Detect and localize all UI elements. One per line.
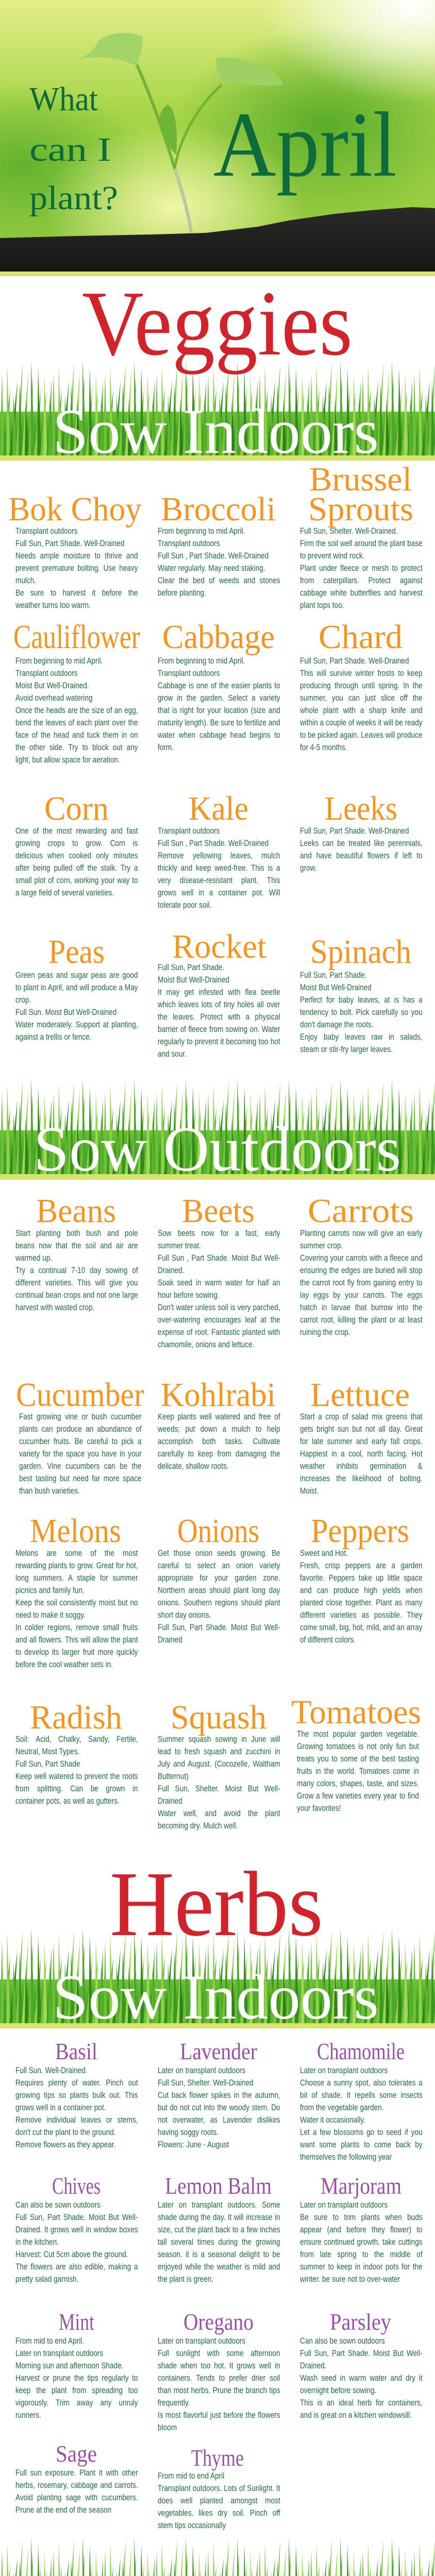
veggie: Lettuce: Lettuce [310, 1376, 410, 1414]
text: Chamomile: Let a few blossoms go to seed if you want some plants to come back by themselves the following year [300, 2127, 423, 2162]
text: Cauliflower: From beginning to mid April. [15, 656, 103, 666]
veggie: Cucumber: Cucumber [16, 1376, 144, 1414]
text: Oregano: Is most flavorful just before the flowers bloom [158, 2410, 280, 2432]
text: Radish [15, 1733, 138, 1807]
text: Mint: Harvest or prune the tips regularly to keep the plant from spreading too vigorously. Trim away any unruly runners. [15, 2373, 138, 2420]
veggie: Peppers: Peppers [311, 1512, 409, 1550]
text: Broccoli: Full Sun , Part Shade. Well-Drained [158, 551, 269, 561]
text: Melons: Keep the soil consistently moist but no need to make it soggy. [15, 1598, 138, 1620]
veggie: Brussel Sprouts [308, 461, 413, 528]
text: Kale: Full Sun , Part Shade. Well-Drained [158, 838, 269, 848]
text: Melons: In colder regions, remove small fruits and all flowers. This will allow the plant to develop its larger fruit more quickly before the cool weather sets in. [15, 1622, 138, 1669]
herb: Lemon Balm: Lemon Balm [165, 2173, 272, 2199]
title: What can I plant?: plant? [29, 179, 118, 217]
veggie: Beets: Beets [182, 1192, 255, 1230]
text: Rocket: Full Sun, Part Shade. [158, 962, 224, 972]
text: Chamomile: Later on transplant outdoors [300, 2065, 388, 2075]
text: Carrots: Covering your carrots with a fleece and ensuring the edges are buried will stop the carrot root fly from gaining entry to lay eggs by your carrots. The eggs hatch in larvae that burrow into the carrot root, killing the plant or at least ruining the crop. [300, 1253, 423, 1337]
text: Cabbage: From beginning to mid April. [158, 656, 245, 666]
seedling [74, 33, 282, 232]
text: Cauliflower [15, 656, 138, 765]
text: Rocket: It may get infested with flea beetle which leaves lots of tiny holes all over the leaves. Protect with a physical barrier of fleece from sowing on. Water regularly to prevent it becoming too hot and sour. [158, 987, 280, 1059]
title: What can I plant?: What [29, 80, 98, 118]
veggie: Kale: Kale [189, 790, 248, 827]
text: Parsley: Full Sun, Part Shade. Moist But Well-Drained. [300, 2348, 423, 2370]
herb: Sage: Sage [56, 2441, 97, 2467]
text: Beans [15, 1228, 138, 1312]
veggie: Cauliflower: Cauliflower [13, 618, 140, 656]
text: Sage: Full sun exposure. Plant it with other herbs, rosemary, cabbage and carrots. Avoid planting sage with cucumbers. Prune at the end of the season [15, 2468, 138, 2515]
herb: Mint: Mint [59, 2309, 94, 2335]
text: Brussel Sprouts: Plant under fleece or mesh to protect from caterpillars. Protect against cabbage white butterflies and harvest plant tops too. [300, 563, 423, 610]
text: Kale: Transplant outdoors [158, 826, 220, 836]
text: Oregano: Later on transplant outdoors [158, 2336, 245, 2346]
text: Peas: Full Sun. Moist But Well-Drained [15, 1007, 116, 1017]
text: Broccoli: Clear the bed of weeds and stones before planting. [158, 575, 280, 598]
text: Tomatoes: The most popular garden vegetable. Growing tomatoes is not only fun but treats you to some of the best tasting fruits in the world. Tomatoes come in many colors, shapes, taste, and sizes. Grow a few varieties every year to find your favorites! [297, 1729, 419, 1813]
text: Mint: Later on transplant outdoors [15, 2348, 103, 2358]
veggie: Brussel Sprouts: Sprouts [308, 490, 413, 528]
text: Basil: Remove flowers as they appear. [15, 2140, 115, 2149]
band: herbs sow outdoors [0, 2534, 435, 2576]
veggie: Melons: Melons [30, 1512, 121, 1550]
text: Chives: Can also be sown outdoors [15, 2200, 101, 2210]
text: Spinach [300, 970, 423, 1054]
text: Parsley: Can also be sown outdoors [300, 2336, 385, 2346]
text: Marjoram: Later on transplant outdoors [300, 2200, 388, 2210]
text: Bok Choy: Transplant outdoors [15, 526, 77, 536]
text: Spinach: Full Sun, Part Shade. [300, 970, 366, 980]
text: Basil: Full Sun. Well-Drained. [15, 2065, 88, 2075]
text: Kale: Remove yellowing leaves, mulch thickly and keep weed-free. This is a very disease-resistant plant. This grows well in a container pot. Will tolerate poor soil. [158, 851, 280, 910]
text: Lettuce: Start a crop of salad mix greens that gets bright sun but not all day. Great for late summer and early fall crops. Happiest in a cool, north facing. Hot weather inhibits germination & increases the likelihood of bolting. Moist. [300, 1412, 423, 1496]
text: Broccoli: Water regularly. May need staking. [158, 563, 265, 573]
text: Radish: Soil: Acid, Chalky, Sandy, Fertile, Neutral, Most Types. [15, 1734, 138, 1756]
text: Peppers: Fresh, crisp peppers are a garden favorite. Peppers take up little space and can produce high yields when planted close together. Plant as many different varieties as possible. They come small, big, hot, mild, and an array of different colors. [300, 1561, 423, 1645]
text: Beets [158, 1228, 280, 1349]
band: veggies sow outdoors [0, 1079, 435, 1180]
text: Radish: Keep well watered to prevent the roots from splitting. Can be grown in container pots, as well as gutters. [15, 1771, 138, 1806]
text: Cauliflower: Moist But Well-Drained. [15, 681, 89, 690]
text: Cauliflower: Transplant outdoors [15, 668, 77, 678]
text: Broccoli [158, 526, 280, 598]
text: Marjoram: Be sure to trim plants when buds appear (and before they flower) to ensure continued growth. take cuttings from late spring to the middle of summer to keep in indoor pots for the winter. be sure not to over-water [300, 2212, 423, 2284]
text: Brussel Sprouts: Firm the soil well around the plant base to prevent wind rock. [300, 538, 423, 561]
text: Corn: One of the most rewarding and fast growing crops to grow. Corn is delicious when cooked only minutes after being pulled off the stalk. Try a small plot of corn, working your way to a large field of several varieties. [15, 826, 138, 897]
text: Beets: Sow beets now for a fast, early summer treat. [158, 1228, 280, 1250]
text: Cucumber: Fast growing vine or bush cucumber plants can produce an abundance of cucumber fruits. Be careful to pick a variety for the space you have in your garden. Vine cucumbers can be the best tasting but need far more space than bush varieties. [19, 1412, 142, 1496]
text: Radish: Full Sun, Part Shade [15, 1759, 80, 1769]
text: Chamomile [300, 2064, 423, 2163]
text: Chives: The flowers are also edible, making a pretty salad garnish. [15, 2262, 138, 2284]
text: Basil [15, 2064, 138, 2151]
text: Chard: This will survive winter frosts to keep producing through until spring. In the summer, you can just slice off the whole plant with a sharp knife and within a couple of weeks it will be ready to be picked again. Leaves will produce for 4-5 months. [300, 668, 423, 752]
text: Parsley: Wash seed in warm water and dry it overnight before sowing. [300, 2373, 423, 2395]
herb: Parsley: Parsley [330, 2309, 391, 2335]
text: Spinach: Perfect for baby leaves, at is has a tendency to bolt. Pick carefully so you don't damage the roots. [300, 995, 423, 1029]
veggie: Chard: Chard [319, 618, 403, 656]
text: Leeks: Full Sun, Part Shade. Well-Drained [300, 826, 409, 836]
text: Leeks: Leeks can be treated like perennials, and have beautiful flowers if left to grow. [300, 838, 423, 873]
text: Cauliflower: Avoid overhead watering [15, 693, 92, 703]
text: Melons [15, 1548, 138, 1669]
text: Bok Choy: Full Sun, Part Shade. Well-Drained [15, 538, 124, 548]
veggie: Corn: Corn [44, 790, 109, 827]
text: Chard: Full Sun, Part Shade. Well-Drained [300, 656, 409, 666]
text: Lavender: Full Sun, Shelter. Well-Drained [158, 2078, 254, 2088]
text: Mint: From mid to end April. [15, 2336, 84, 2346]
text: Basil: Remove individual leaves or stems, don't cut the plant to the ground. [15, 2115, 138, 2137]
text: Thyme: Transplant outdoors. Lots of Sunlight. It does well planted amongst most vegetables. likes dry soil. Pinch off stem tips occasionally [158, 2483, 280, 2530]
title: April: April [213, 93, 397, 196]
text: Lemon Balm: Later on transplant outdoors. Some shade during the day. It will increase in size, cut the plant back to a few inches tall several times during the growing season. it is a seasonal delight to be enjoyed while the weather is mild and the plant is green. [158, 2200, 280, 2284]
text: Peas: Water moderately. Support at planting, against a trellis or fence. [15, 1020, 138, 1042]
text: Peas: Green peas and sugar peas are good to plant in April, and will produce a May crop. [15, 970, 138, 1005]
text: Chives: Full Sun, Part Shade. Moist But Well-Drained. It grows well in window boxes in the kitchen. [15, 2212, 138, 2247]
veggie: Carrots: Carrots [308, 1192, 414, 1230]
herb: Thyme: Thyme [191, 2445, 244, 2471]
text: Mint: Morning sun and afternoon Shade. [15, 2361, 123, 2370]
text: Spinach: Moist But Well-Drained [300, 982, 372, 992]
text: Spinach: Enjoy baby leaves raw in salads, steam or stir-fry larger leaves. [300, 1032, 423, 1054]
text: Cauliflower: Once the heads are the size of an egg, bend the leaves of each plant over the face of the head and tuck them in on the other side. Try to block out any light, but allow space for aeration. [15, 705, 138, 765]
text: Kohlrabi: Keep plants well watered and free of weeds; put down a mulch to help accomplish both tasks. Cultivate carefully to keep from damaging the delicate, shallow roots. [158, 1412, 280, 1471]
veggie: Brussel Sprouts: Brussel [309, 461, 412, 498]
text: Melons: Melons are some of the most rewarding plants to grow. Great for hot, long summers. A staple for summer picnics and family fun. [15, 1548, 138, 1595]
text: Parsley: This is an ideal herb for containers, and is great on a kitchen windowsill. [300, 2398, 423, 2420]
header: photo of seedling with title [0, 0, 435, 276]
title: What can I plant? [29, 80, 118, 217]
text: Bok Choy: Be sure to harvest it before the weather turns too warm. [15, 588, 138, 610]
veggie: Squash: Squash [171, 1699, 266, 1736]
text: Squash: Water well, and avoid the plant becoming dry. Mulch well. [158, 1808, 280, 1831]
veggie: Leeks: Leeks [325, 790, 397, 827]
text: Chives [15, 2199, 138, 2285]
herb: Basil: Basil [55, 2038, 97, 2064]
text: Cabbage: Cabbage is one of the easier plants to grow in the garden. Select a variety that is right for your location (size and maturity length). Be sure to fertilize and water when cabbage head begins to form. [158, 681, 280, 752]
text: Broccoli: Transplant outdoors [158, 538, 220, 548]
text: Brussel Sprouts: Full Sun, Shelter. Well-Drained. [300, 526, 397, 536]
text: Squash [158, 1733, 280, 1832]
text: Basil: Requires plenty of water. Pinch out growing tips so plants bulk out. This grows well in a container pot. [15, 2078, 138, 2112]
text: Carrots: Planting carrots now will give an early summer crop. [300, 1228, 423, 1250]
text: Oregano: Full sunlight with some afternoon shade when too hot. It grows well in containers. Tends to prefer drier soil than most herbs. Prune the branch tips frequently. [158, 2348, 280, 2408]
band: herbs sow indoors [0, 1925, 435, 2028]
text: Beets: Soak seed in warm water for half an hour before sowing. [158, 1278, 280, 1300]
text: Brussel Sprouts [300, 526, 423, 610]
text: Beets: Full Sun , Part Shade. Moist But Well-Drained. [158, 1253, 280, 1275]
text: Chamomile: Water it occasionally. [300, 2115, 365, 2125]
veggie: Cabbage: Cabbage [162, 618, 275, 656]
text: Cabbage: Transplant outdoors [158, 668, 220, 678]
text: Lavender: Cut back flower spikes in the autumn, but do not cut into the woody stem. Do not overwater, as Lavender dislikes having soggy roots. [158, 2090, 280, 2137]
text: Thyme: From mid to end April [158, 2471, 224, 2481]
veggie: Broccoli: Broccoli [161, 490, 276, 528]
soil [0, 207, 435, 272]
text: Onions: Get those onion seeds growing. Be careful to select an onion variety appropriate for your garden zone. Northern areas should plant long day onions. Southern regions should plant short day onions. [158, 1548, 280, 1620]
text: Bok Choy: Needs ample moisture to thrive and prevent premature bolting. Use heavy mulch. [15, 551, 138, 585]
title: What can I plant?: can I [29, 131, 111, 168]
text: Rocket: Moist But Well-Drained [158, 975, 229, 985]
text: Squash: Summer squash sowing in June will lead to fresh squash and zucchini in July and August. (Cocozelle, Waltham Butternut) [158, 1734, 280, 1781]
band: veggies sow indoors [0, 361, 435, 461]
text: Lavender: Flowers: June - August [158, 2140, 229, 2149]
text: Lavender [158, 2064, 280, 2151]
text: Beans: Try a continual 7-10 day sowing of different varieties. This will give you continual bean crops and not one large harvest with wasted crop. [15, 1265, 138, 1312]
veggie: Tomatoes: Tomatoes [291, 1693, 421, 1731]
text: Lavender: Later on transplant outdoors [158, 2065, 245, 2075]
veggie: Kohlrabi: Kohlrabi [161, 1376, 276, 1414]
text: Beans: Start planting both bush and pole beans now that the soil and air are warmed up. [15, 1228, 138, 1263]
text: Chamomile: Choose a sunny spot, also tolerates a bit of shade. It repells some insects from the vegetable garden. [300, 2078, 423, 2112]
text: Peas [15, 970, 138, 1042]
herb: Chamomile: Chamomile [317, 2038, 405, 2064]
text: Parsley [300, 2335, 423, 2421]
veggie: Rocket: Rocket [172, 928, 266, 965]
text: Bok Choy [15, 526, 138, 610]
veggie: Radish: Radish [30, 1699, 122, 1736]
herb: Oregano: Oregano [183, 2309, 254, 2335]
text: Oregano [158, 2335, 280, 2434]
text: Peppers: Sweet and Hot. [300, 1548, 348, 1558]
veggie: Spinach: Spinach [310, 933, 411, 971]
veggie: Bok Choy: Bok Choy [8, 490, 142, 528]
veggie: Beans: Beans [36, 1192, 116, 1230]
text: Mint [15, 2335, 138, 2421]
text: Broccoli: From beginning to mid April. [158, 526, 245, 536]
herb: Lavender: Lavender [180, 2038, 257, 2064]
herb: Chives: Chives [52, 2173, 101, 2199]
text: Beets: Don't water unless soil is very parched, over-watering encourages leaf at the expense of root. Fantastic planted with chamomile, onions and lettuce. [158, 1302, 280, 1349]
text: Chives: Harvest: Cut 5cm above the ground. [15, 2249, 128, 2259]
text: Onions: Full Sun, Part Shade. Moist But Well-Drained [158, 1622, 280, 1645]
text: Squash: Full Sun, Shelter. Moist But Well-Drained [158, 1784, 280, 1806]
veggie: Peas: Peas [48, 933, 105, 971]
herb: Marjoram: Marjoram [321, 2173, 401, 2199]
veggie: Onions: Onions [177, 1512, 259, 1550]
